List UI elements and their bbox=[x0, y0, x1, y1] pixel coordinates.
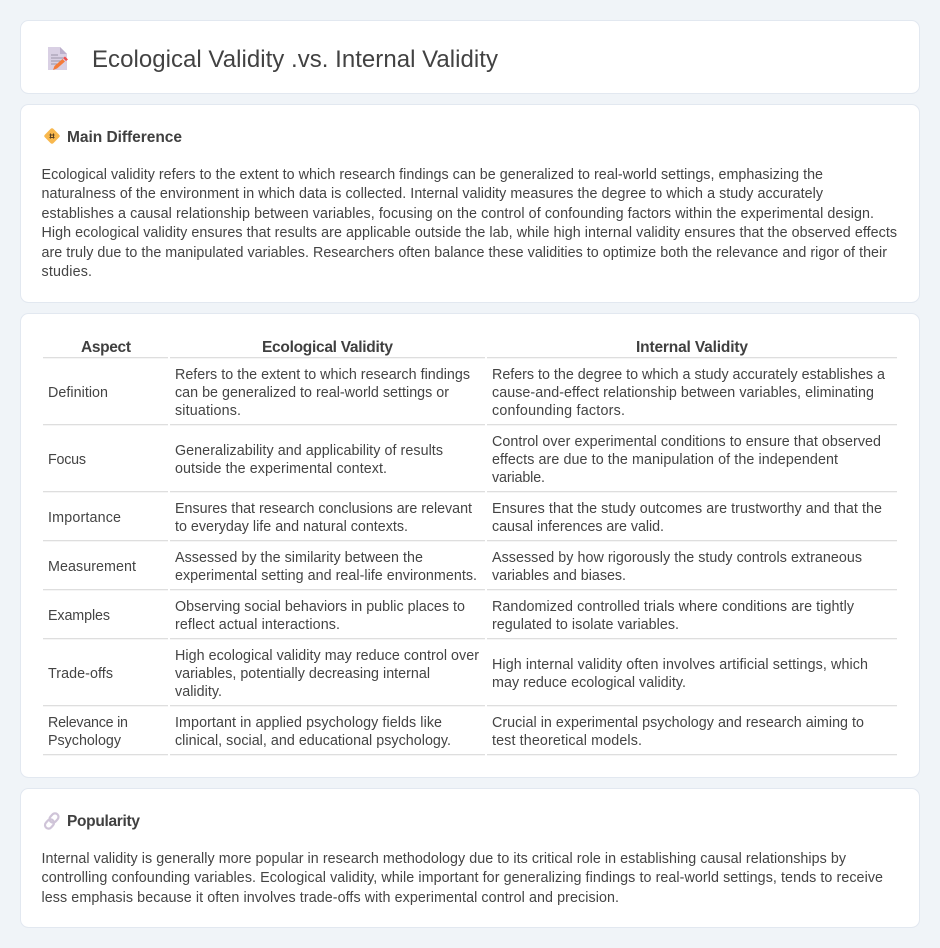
table row: importance: causal inferences are valid. bbox=[492, 519, 664, 535]
table row: focus: outside the experimental context. bbox=[175, 461, 387, 477]
panel: main difference bbox=[20, 104, 920, 302]
table row: relevance in psychology bbox=[43, 715, 897, 755]
table row: definition: Refers to the extent to which research findings bbox=[175, 367, 470, 383]
table row: focus bbox=[43, 434, 897, 492]
table row: measurement: Measurement bbox=[48, 559, 136, 575]
table row: measurement: Assessed by the similarity between the bbox=[175, 550, 423, 566]
table row: focus: Generalizability and applicability of results bbox=[175, 443, 443, 459]
text block: popularity body: controlling confounding variables. Ecological validity, while important for generalizing findings to real-world settings, tends to receive bbox=[42, 870, 883, 886]
text block: main difference body bbox=[42, 167, 897, 280]
table row: definition: cause-and-effect relationship between variables, eliminating bbox=[492, 385, 874, 401]
table row: relevance in psychology: Crucial in experimental psychology and research aiming to bbox=[492, 715, 864, 731]
table row: focus: variable. bbox=[492, 470, 545, 486]
table row: definition: Definition bbox=[48, 385, 108, 401]
table row: importance: Ensures that research conclusions are relevant bbox=[175, 501, 472, 517]
table row: relevance in psychology: Psychology bbox=[48, 733, 122, 749]
icon: chain link bbox=[44, 812, 60, 830]
table row: focus: Control over experimental conditions to ensure that observed bbox=[492, 434, 881, 450]
table row: definition: situations. bbox=[175, 403, 241, 419]
table row: relevance in psychology: Relevance in bbox=[48, 715, 128, 731]
text block: main difference body: studies. bbox=[42, 264, 92, 280]
table row: importance bbox=[43, 501, 897, 541]
table row: definition: Refers to the degree to which a study accurately establishes a bbox=[492, 367, 885, 383]
table row: relevance in psychology: test theoretical models. bbox=[492, 733, 642, 749]
table row: importance: to everyday life and natural contexts. bbox=[175, 519, 408, 535]
table row: definition: confounding factors. bbox=[492, 403, 625, 419]
table row: relevance in psychology: clinical, social, and educational psychology. bbox=[175, 733, 451, 749]
table row: focus: Focus bbox=[48, 452, 86, 468]
table row: examples: Examples bbox=[48, 608, 110, 624]
text block: popularity body: less emphasis because it often involves trade-offs with experimental control and precision. bbox=[42, 890, 619, 906]
table header row: Aspect bbox=[81, 339, 131, 356]
text block: main difference body: naturalness of the environment in which data is collected. Internal validity measures the degree to which a study accurately bbox=[42, 186, 824, 202]
table row: definition bbox=[43, 367, 897, 425]
table row: examples: reflect actual interactions. bbox=[175, 617, 340, 633]
table row: trade-offs: may reduce ecological validity. bbox=[492, 675, 686, 691]
table row: measurement: Assessed by how rigorously the study controls extraneous bbox=[492, 550, 862, 566]
panel: popularity bbox=[20, 788, 920, 928]
text block: main difference body: establishes a causal relationship between variables, focusing on the control of confounding factors within the experimental design. bbox=[42, 206, 874, 222]
table row: examples: Randomized controlled trials where conditions are tightly bbox=[492, 599, 855, 615]
table header row: Internal Validity bbox=[636, 339, 748, 356]
text block: main difference body: Ecological validity refers to the extent to which research findings can be generalized to real-world settings, emphasizing the bbox=[42, 167, 823, 183]
table row: trade-offs: High internal validity often involves artificial settings, which bbox=[492, 657, 868, 673]
table row: examples: regulated to isolate variables. bbox=[492, 617, 679, 633]
panel: comparison table bbox=[20, 314, 920, 778]
title: Ecological Validity .vs. Internal Validity bbox=[92, 46, 498, 73]
table row: trade-offs: validity. bbox=[175, 684, 222, 700]
table row: trade-offs bbox=[43, 648, 897, 706]
heading: main difference: Main Difference bbox=[67, 129, 182, 146]
text block: main difference body: are truly due to the manipulated variables. Researchers often balance these validities to optimize both the relevance and rigor of their bbox=[42, 245, 887, 261]
table header row bbox=[43, 339, 897, 358]
text block: popularity body: Internal validity is generally more popular in research methodology due to its critical role in establishing causal relationships by bbox=[42, 851, 847, 867]
panel: title header bbox=[20, 20, 920, 94]
table row: trade-offs: High ecological validity may reduce control over bbox=[175, 648, 479, 664]
table row: definition: can be generalized to real-world settings or bbox=[175, 385, 449, 401]
table row: measurement: variables and biases. bbox=[492, 568, 626, 584]
table row: relevance in psychology: Important in applied psychology fields like bbox=[175, 715, 442, 731]
table row: trade-offs: Trade-offs bbox=[48, 666, 113, 682]
heading: popularity: Popularity bbox=[67, 813, 140, 830]
table row: focus: effects are due to the manipulation of the independent bbox=[492, 452, 838, 468]
table row: trade-offs: variables, potentially decreasing internal bbox=[175, 666, 430, 682]
table row: importance: Importance bbox=[48, 510, 121, 526]
table header row: Ecological Validity bbox=[262, 339, 393, 356]
table row: examples bbox=[43, 599, 897, 639]
table row: importance: Ensures that the study outcomes are trustworthy and that the bbox=[492, 501, 882, 517]
table row: measurement bbox=[43, 550, 897, 590]
table row: examples: Observing social behaviors in public places to bbox=[175, 599, 465, 615]
text block: popularity body bbox=[42, 851, 883, 906]
text block: main difference body: High ecological validity ensures that results are applicable outside the lab, while high internal validity ensures that the observed effects bbox=[42, 225, 897, 241]
icon: document with pencil bbox=[48, 47, 68, 70]
icon: warning diamond bbox=[44, 128, 60, 144]
table row: measurement: experimental setting and real-life environments. bbox=[175, 568, 477, 584]
